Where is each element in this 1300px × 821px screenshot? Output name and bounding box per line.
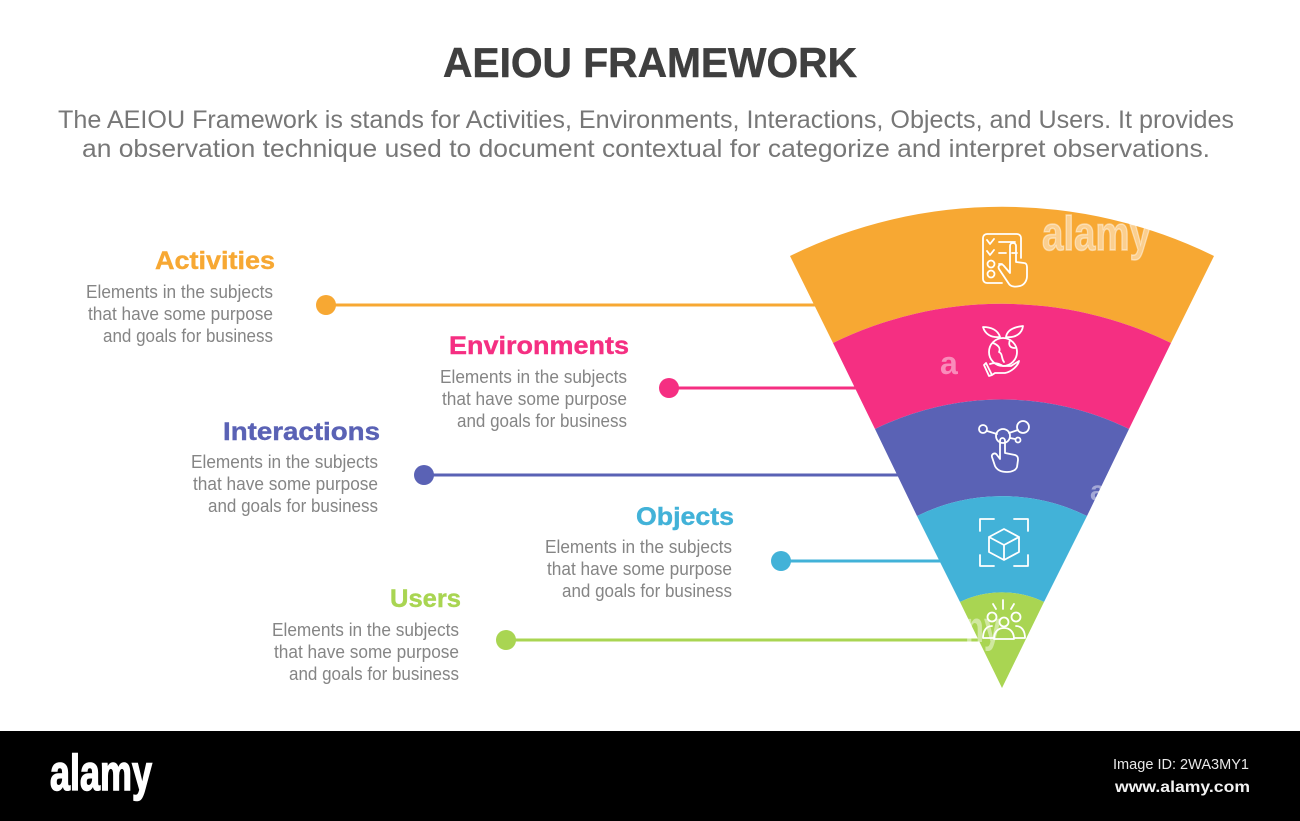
connector: users	[496, 630, 985, 650]
segment: environments	[833, 304, 1171, 429]
subtitle: an observation technique used to document contextual for categorize and interpret observations.	[82, 135, 1210, 163]
segment: objects	[917, 496, 1087, 602]
label: interactions: Elements in the subjects	[191, 452, 378, 472]
connector: environments	[659, 378, 870, 398]
segment: activities	[790, 207, 1214, 343]
label: activities: Activities	[155, 247, 275, 275]
connector: objects	[771, 551, 950, 571]
label: users: Elements in the subjects	[272, 620, 459, 640]
label: objects: Elements in the subjects	[545, 537, 732, 557]
label: activities	[86, 247, 275, 346]
icon: checklist with hand	[983, 234, 1027, 287]
watermark fragments: ny	[965, 603, 1001, 652]
connector: activities	[316, 295, 830, 315]
footer bar	[0, 731, 1300, 821]
watermark fragments	[940, 208, 1151, 652]
footer logo: alamy	[50, 745, 152, 801]
label: environments: that have some purpose	[442, 389, 627, 409]
connector: interactions	[414, 465, 910, 485]
watermark fragments: a	[1090, 475, 1106, 506]
subtitle	[58, 106, 1234, 163]
label: objects: Objects	[636, 503, 734, 531]
label: activities: Elements in the subjects	[86, 282, 273, 302]
icon: 3d box in frame	[980, 519, 1028, 566]
icon: network with pointing hand	[979, 421, 1029, 472]
label: interactions: that have some purpose	[193, 474, 378, 494]
title: AEIOU FRAMEWORK	[443, 39, 857, 86]
label: interactions	[191, 418, 380, 516]
label: environments	[440, 332, 629, 431]
label: users: that have some purpose	[274, 642, 459, 662]
label: activities: that have some purpose	[88, 304, 273, 324]
label: environments: Environments	[449, 332, 629, 360]
label: interactions: Interactions	[223, 418, 380, 446]
funnel fan chart	[790, 207, 1214, 688]
label: users: Users	[390, 585, 461, 613]
label: objects: and goals for business	[562, 581, 732, 601]
label: environments: and goals for business	[457, 411, 627, 431]
label: objects	[545, 503, 734, 601]
label: interactions: and goals for business	[208, 496, 378, 516]
label: activities: and goals for business	[103, 326, 273, 346]
label: objects: that have some purpose	[547, 559, 732, 579]
segment: interactions	[875, 399, 1129, 516]
website: www.alamy.com	[1114, 779, 1250, 796]
image id: Image ID: 2WA3MY1	[1113, 756, 1249, 773]
watermark fragments: alamy	[1042, 208, 1151, 261]
icon: group of users	[983, 600, 1025, 639]
icon: globe with leaves in hand	[983, 326, 1023, 376]
label: users: and goals for business	[289, 664, 459, 684]
subtitle: The AEIOU Framework is stands for Activities, Environments, Interactions, Objects, and Users. It provides	[58, 106, 1234, 134]
label: environments: Elements in the subjects	[440, 367, 627, 387]
label: users	[272, 585, 461, 684]
watermark fragments: a	[940, 345, 958, 381]
segment: users	[960, 592, 1044, 688]
